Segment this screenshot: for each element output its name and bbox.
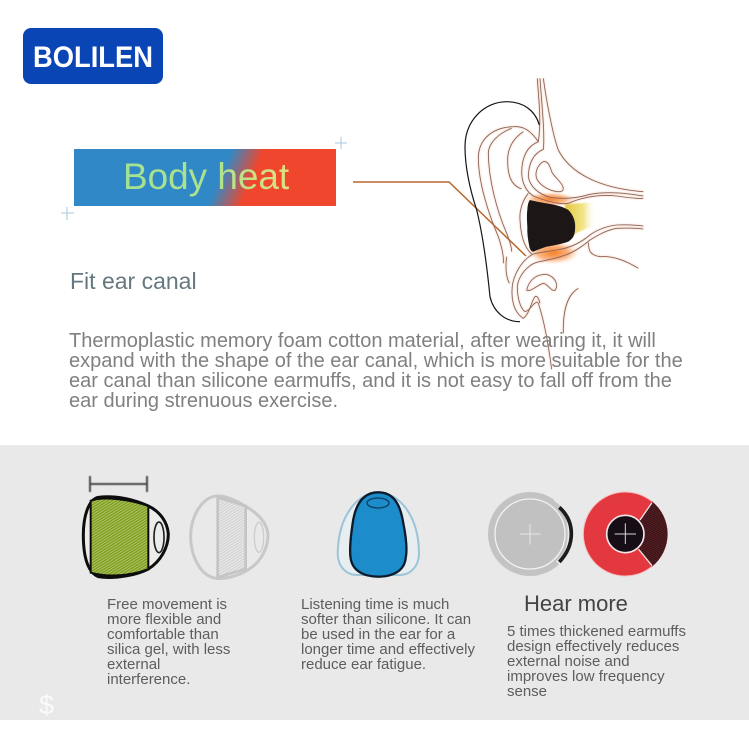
bottom grey panel (0, 445, 749, 720)
caption: thickened earmuffs: external noise and (507, 653, 630, 670)
caption: thickened earmuffs: sense (507, 683, 547, 700)
caption: thickened earmuffs: improves low frequency (507, 668, 665, 685)
caption: free movement: Free movement is (107, 596, 227, 612)
caption: thickened earmuffs (507, 623, 686, 700)
icon: blue ear tip (338, 492, 419, 577)
body text: expand with the shape of the ear canal, which is more suitable for the (69, 350, 683, 372)
caption: free movement: silica gel, with less (107, 640, 230, 658)
caption: free movement: external (107, 656, 160, 672)
heading: hear more: Hear more (524, 591, 628, 616)
caption: listening time (301, 596, 475, 672)
caption: listening time: longer time and effectively (301, 640, 475, 658)
outer ear outline (465, 102, 539, 322)
heading: fit ear canal: Fit ear canal (70, 268, 197, 294)
ear contour lines (478, 78, 643, 369)
icon: green hatched ear tip (83, 497, 168, 577)
caption: listening time: softer than silicone. It can (301, 610, 471, 628)
icon: grey disc (488, 492, 577, 576)
caption: listening time: Listening time is much (301, 596, 449, 612)
plus mark top right (335, 137, 347, 149)
plus mark bottom left (61, 207, 74, 220)
icon: grey hatched ear tip (191, 496, 268, 578)
icon: red disc (583, 492, 668, 576)
body text: Thermoplastic memory foam cotton material, after wearing it, it will (69, 330, 656, 352)
body text (69, 330, 683, 412)
logo badge: BOLILEN (33, 41, 153, 74)
caption: thickened earmuffs: 5 times thickened earmuffs (507, 623, 686, 640)
black foam ear tip (527, 200, 575, 252)
body heat gradient bar: Body heat (123, 156, 289, 197)
caption: free movement: more flexible and (107, 610, 221, 628)
leader line (353, 182, 526, 256)
heat glow (522, 191, 596, 265)
ear illustration (465, 78, 643, 369)
caption: thickened earmuffs: design effectively reduces (507, 638, 679, 655)
caption: free movement: interference. (107, 670, 190, 688)
caption: listening time: be used in the ear for a (301, 626, 455, 642)
body heat gradient bar (74, 149, 336, 206)
caption: free movement: comfortable than (107, 626, 219, 642)
body text: ear during strenuous exercise. (69, 390, 338, 412)
dollar mark: $ (39, 690, 54, 720)
caption: listening time: reduce ear fatigue. (301, 656, 426, 672)
caption: free movement (107, 596, 230, 688)
body text: ear canal than silicone earmuffs, and it is not easy to fall off from the (69, 370, 672, 392)
logo badge (23, 28, 163, 84)
icon: width marker (90, 476, 147, 492)
